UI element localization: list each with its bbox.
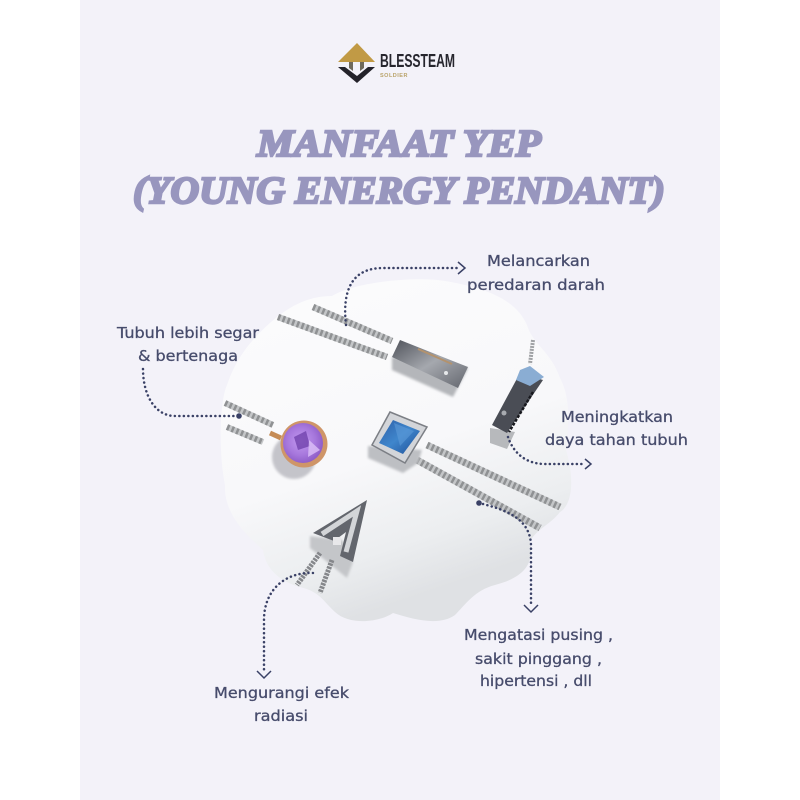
label: radiasi: radiasi — [254, 707, 308, 725]
logo subtitle: SOLDIER — [380, 73, 408, 79]
title: (YOUNG ENERGY PENDANT) — [133, 170, 665, 212]
logo — [338, 43, 455, 83]
label: Melancarkan: Melancarkan — [487, 252, 590, 270]
arrow: to radiation reduction — [257, 573, 313, 678]
label: daya tahan tubuh: daya tahan tubuh — [545, 431, 688, 449]
pendant: purple round gem — [225, 403, 328, 479]
pendant: blue square gem — [368, 412, 560, 528]
icon: gold and black diamond — [338, 43, 375, 83]
label: & bertenaga: & bertenaga — [138, 347, 238, 365]
label: sakit pinggang: sakit pinggang , — [475, 650, 602, 668]
arrow: to blood circulation — [345, 262, 465, 325]
label: Mengatasi pusing: Mengatasi pusing , — [464, 626, 613, 644]
label: peredaran darah: peredaran darah — [467, 276, 605, 294]
label: Mengurangi efek: Mengurangi efek — [214, 684, 349, 702]
label: hipertensi, dll: hipertensi , dll — [480, 672, 592, 690]
label: Tubuh lebih segar: Tubuh lebih segar — [116, 324, 260, 342]
label: Meningkatkan: Meningkatkan — [561, 408, 673, 426]
scalloped product backdrop — [221, 279, 571, 621]
arrow: to dizziness relief — [476, 500, 538, 612]
pendant: dark bar right — [490, 340, 544, 449]
background panel — [80, 0, 720, 800]
title — [133, 123, 665, 212]
arrow: to immune system — [508, 437, 591, 469]
logo wordmark: BLESSTEAM — [380, 51, 455, 71]
pendant: silver arrow — [297, 500, 367, 593]
pendant: rectangular bar top — [278, 307, 468, 397]
title: MANFAAT YEP — [256, 123, 542, 165]
arrow: from refreshed body — [143, 369, 242, 419]
